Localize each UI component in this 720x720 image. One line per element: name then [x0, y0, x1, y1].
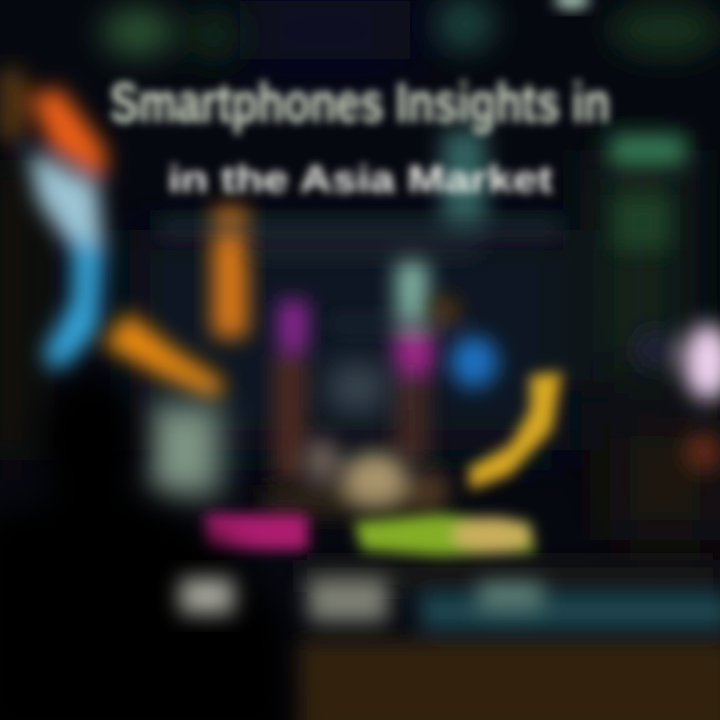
- pale building block: [150, 365, 385, 495]
- pale green column with magenta sign: [394, 130, 486, 464]
- top pale light: [554, 0, 590, 9]
- background glow panels: [0, 0, 720, 540]
- green yellow banner: [354, 514, 535, 556]
- right green sign: [610, 135, 686, 250]
- street ground: [295, 560, 720, 720]
- right pink light: [637, 324, 720, 472]
- top foliage: [102, 0, 720, 63]
- orange neon arrow: [102, 312, 225, 400]
- yellow curved sign: [468, 372, 562, 490]
- blue neon spot: [433, 298, 498, 388]
- crowd lights: [265, 438, 450, 517]
- magenta banner: [204, 514, 308, 550]
- pale lower signs: [308, 578, 543, 622]
- orange vertical sign: [212, 208, 248, 338]
- pale sign over silhouette: [180, 578, 234, 614]
- silhouette of person: [0, 375, 290, 720]
- subtitle: in the Asia Market: [168, 159, 553, 201]
- left rainbow sign: [0, 70, 106, 375]
- magenta and brown column: [274, 300, 308, 482]
- caption lines: [160, 222, 560, 328]
